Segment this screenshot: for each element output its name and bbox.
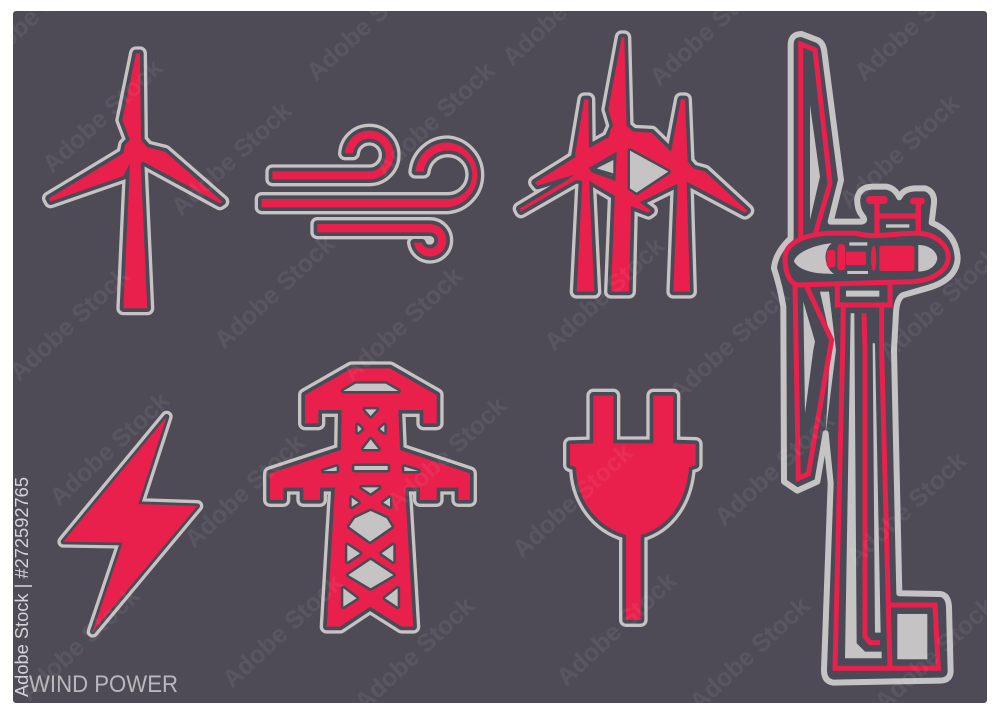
watermark: Adobe Stock [869, 592, 1000, 714]
watermark: Adobe Stock [209, 230, 340, 354]
watermark: Adobe Stock [539, 232, 670, 356]
icon: wind turbine [49, 53, 222, 308]
watermark: Adobe Stock [44, 387, 175, 511]
nacelle housing [785, 233, 948, 285]
watermark: Adobe Stock [349, 592, 480, 714]
icon: electricity pylon [270, 368, 470, 627]
watermark: Adobe Stock [507, 439, 638, 563]
watermark: Adobe Stock [664, 282, 795, 406]
watermark: Adobe Stock [709, 407, 840, 531]
icon: detailed offshore turbine [774, 34, 958, 683]
watermark: Adobe Stock [4, 262, 135, 386]
watermark: Adobe Stock [37, 54, 168, 178]
icon: lightning bolt [63, 417, 197, 632]
watermark: Adobe Stock [551, 567, 682, 691]
watermark: Adobe Stock [834, 90, 965, 214]
icon: electric plug [570, 396, 696, 620]
watermark: Adobe Stock [841, 447, 972, 571]
watermark: Adobe Stock [179, 429, 310, 553]
turbine outline [774, 34, 958, 683]
watermark: Adobe Stock [337, 262, 468, 386]
icon: wind farm of three turbines [520, 37, 747, 292]
tower and foundation [835, 305, 938, 668]
watermark: Adobe Stock [166, 97, 297, 221]
watermark: Adobe Stock [217, 569, 348, 693]
watermark: Adobe Stock [369, 57, 500, 181]
tower base collar [837, 285, 890, 305]
lower blade [795, 283, 836, 478]
stock id caption: Adobe Stock | #272592765 [12, 477, 32, 697]
title: WIND POWER: WIND POWER [29, 671, 178, 698]
nacelle top fittings [866, 196, 925, 233]
icon: wind gusts [262, 131, 477, 257]
upper blade [801, 44, 830, 240]
watermark: Adobe Stock [381, 392, 512, 516]
watermark: Adobe Stock [14, 582, 145, 706]
watermark: Adobe Stock [684, 592, 815, 714]
